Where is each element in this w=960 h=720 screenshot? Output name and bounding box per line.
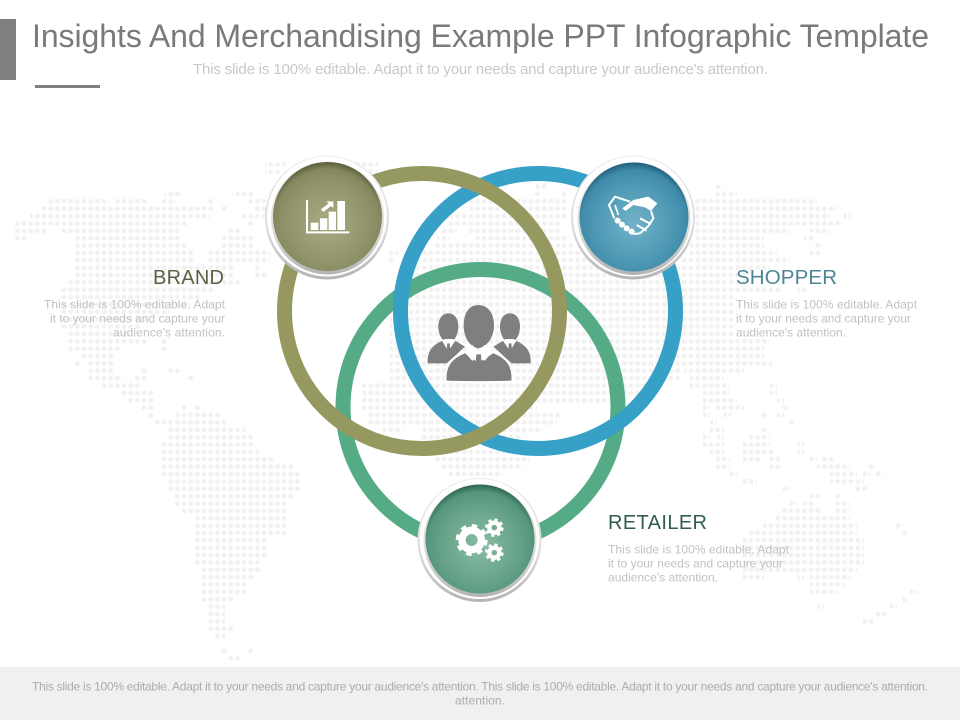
footer band (0, 667, 960, 720)
text block: brand: BRAND (153, 267, 224, 289)
icon: handshake (609, 197, 657, 235)
icon: group of three people (428, 305, 531, 382)
text block: shopper: audience's attention. (736, 326, 846, 340)
button: shopper (571, 156, 695, 280)
footer band: This slide is 100% editable. Adapt it to your needs and capture your audience's attention. This slide is 100% editable. Adapt it to your needs and capture your audience's attention. (32, 680, 928, 694)
title underline (35, 85, 100, 88)
text block: brand: This slide is 100% editable. Adapt (44, 298, 226, 312)
icon: three gears (458, 520, 502, 561)
interlocking rings (284, 174, 676, 544)
icon: rising bar chart (306, 200, 349, 233)
ring: shopper (400, 174, 676, 448)
text block: brand: audience's attention. (113, 326, 225, 340)
text block: brand: it to your needs and capture your (50, 312, 225, 326)
button: retailer (418, 478, 542, 602)
ring: brand (284, 174, 560, 448)
text block: retailer: RETAILER (608, 512, 707, 534)
text block: retailer: This slide is 100% editable. Adapt (608, 542, 790, 556)
text block: shopper (736, 266, 920, 340)
title: Insights And Merchandising Example PPT Infographic Template (32, 18, 929, 54)
text block: retailer (608, 512, 792, 584)
text block: retailer: audience's attention. (608, 570, 718, 584)
ring: retailer (343, 270, 618, 544)
button: brand (265, 156, 389, 280)
background: dotted world map (14, 164, 917, 658)
text block: shopper: This slide is 100% editable. Adapt (736, 298, 918, 312)
header accent block (0, 19, 16, 80)
text block: retailer: it to your needs and capture your (608, 556, 783, 570)
text block: shopper: SHOPPER (736, 266, 837, 289)
text block: shopper: it to your needs and capture your (736, 312, 911, 326)
footer band: attention. (455, 694, 505, 708)
subtitle: This slide is 100% editable. Adapt it to your needs and capture your audience's attention. (193, 61, 768, 78)
text block: brand (44, 267, 228, 340)
